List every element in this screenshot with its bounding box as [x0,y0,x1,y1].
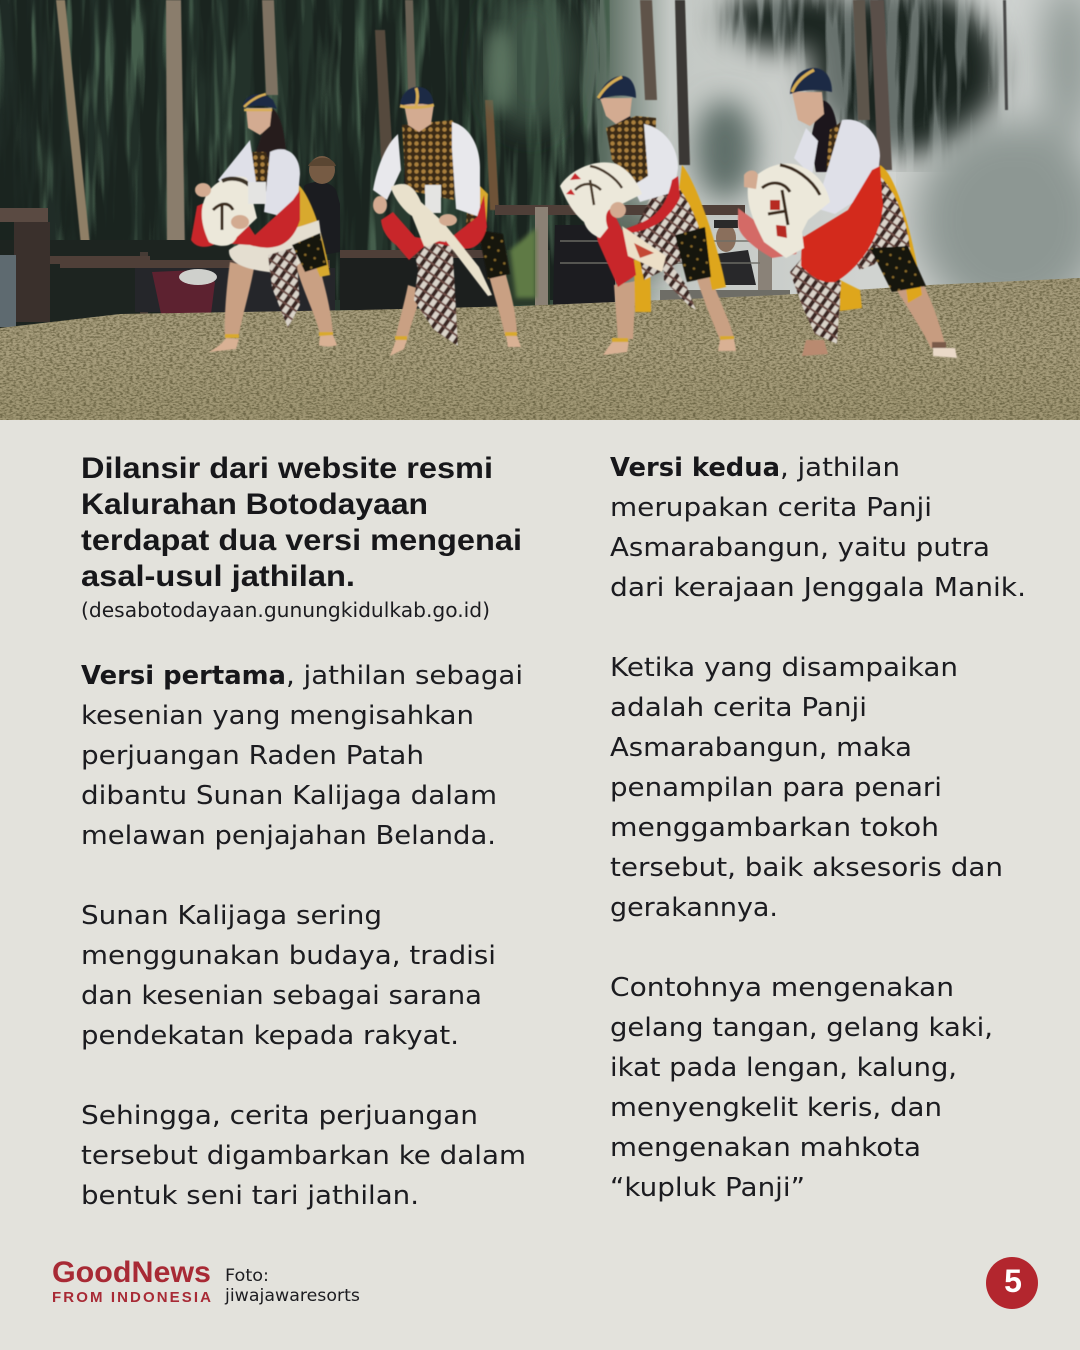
forest and fog background [0,0,1080,320]
page number badge [986,1257,1038,1309]
paragraph: Ketika: penampilan para penari [610,773,942,803]
heading: intro: terdapat dua versi mengenai [81,524,522,557]
paragraph: Sehingga: bentuk seni tari jathilan. [81,1181,419,1211]
paragraph: Ketika [610,653,1003,923]
photo credit [224,1266,360,1305]
photo credit: jiwajawaresorts [224,1286,360,1305]
dancer 2 [373,87,521,356]
heading: intro: asal-usul jathilan. [81,560,355,593]
paragraph: Contohnya: menyengkelit keris, dan [610,1093,942,1123]
photo: jathilan dancers on lawn [0,0,1080,420]
paragraph: versi kedua: dari kerajaan Jenggala Manik. [610,573,1026,603]
logo: GoodNews from Indonesia [52,1256,211,1306]
dancer 1 [191,94,337,352]
paragraph: versi kedua: Versi kedua [610,453,780,483]
paragraph: Sunan Kalijaga: Sunan Kalijaga sering [81,901,382,931]
paragraph: Ketika: gerakannya. [610,893,778,923]
paragraph: Contohnya: Contohnya mengenakan [610,973,954,1003]
paragraph: versi kedua: , jathilan [780,453,900,483]
dancer 4 [738,68,957,358]
paragraph: versi pertama [81,661,523,851]
paragraph: Sunan Kalijaga: dan kesenian sebagai sarana [81,981,482,1011]
paragraph: Sehingga: tersebut digambarkan ke dalam [81,1141,526,1171]
heading: intro: Dilansir dari website resmi [81,452,493,485]
paragraph: Ketika: Asmarabangun, maka [610,733,912,763]
text column: right [610,453,1026,1203]
paragraph: Contohnya: gelang tangan, gelang kaki, [610,1013,993,1043]
source note: (desabotodayaan.gunungkidulkab.go.id) [81,598,490,622]
paragraph: Sunan Kalijaga: pendekatan kepada rakyat. [81,1021,459,1051]
heading: intro: Kalurahan Botodayaan [81,488,428,521]
paragraph: Ketika: adalah cerita Panji [610,693,867,723]
paragraph: Ketika: menggambarkan tokoh [610,813,939,843]
text column: left [81,452,526,1211]
paragraph: versi pertama: dibantu Sunan Kalijaga dalam [81,781,497,811]
paragraph: versi pertama: melawan penjajahan Belanda. [81,821,496,851]
logo: GoodNews from Indonesia: GoodNews [52,1256,211,1289]
paragraph: versi kedua: merupakan cerita Panji [610,493,932,523]
paragraph: Contohnya: ikat pada lengan, kalung, [610,1053,957,1083]
paragraph: versi kedua [610,453,1026,603]
paragraph: versi pertama: Versi pertama [81,661,286,691]
paragraph: Sehingga [81,1101,526,1211]
paragraph: Contohnya: “kupluk Panji” [610,1173,805,1203]
heading: intro [81,452,522,593]
paragraph: versi pertama: perjuangan Raden Patah [81,741,424,771]
paragraph: Ketika: tersebut, baik aksesoris dan [610,853,1003,883]
paragraph: Sehingga: Sehingga, cerita perjuangan [81,1101,478,1131]
logo: GoodNews from Indonesia: FROM INDONESIA [52,1289,211,1306]
paragraph: Sunan Kalijaga: menggunakan budaya, tradisi [81,941,496,971]
fence and equipment [0,156,790,330]
paragraph: Contohnya: mengenakan mahkota [610,1133,921,1163]
paragraph: versi pertama: , jathilan sebagai [286,661,523,691]
paragraph: versi pertama: kesenian yang mengisahkan [81,701,474,731]
page number badge: 5 [1004,1263,1022,1299]
photo credit: Foto: [225,1266,269,1285]
paragraph: Ketika: Ketika yang disampaikan [610,653,958,683]
grass lawn [0,270,1080,420]
paragraph: Contohnya [610,973,993,1203]
paragraph: Sunan Kalijaga [81,901,496,1051]
dancer 3 [560,76,736,355]
paragraph: versi kedua: Asmarabangun, yaitu putra [610,533,990,563]
